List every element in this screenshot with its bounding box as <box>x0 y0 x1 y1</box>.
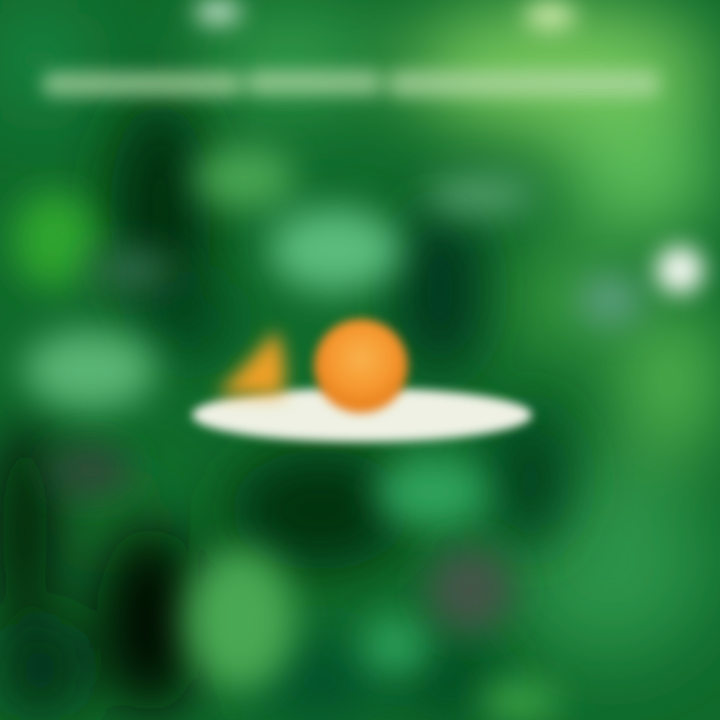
foliage: leaf highlights <box>13 146 642 720</box>
plate with fruit <box>192 319 532 442</box>
plate <box>192 388 532 442</box>
title band (illegible blurred heading) <box>42 70 660 97</box>
foliage: muted grey patches <box>48 250 512 632</box>
background: dark foliage masses <box>0 100 570 718</box>
bright spots at top edge and right side <box>194 0 704 294</box>
whole orange <box>314 319 408 413</box>
orange slice <box>216 330 285 396</box>
